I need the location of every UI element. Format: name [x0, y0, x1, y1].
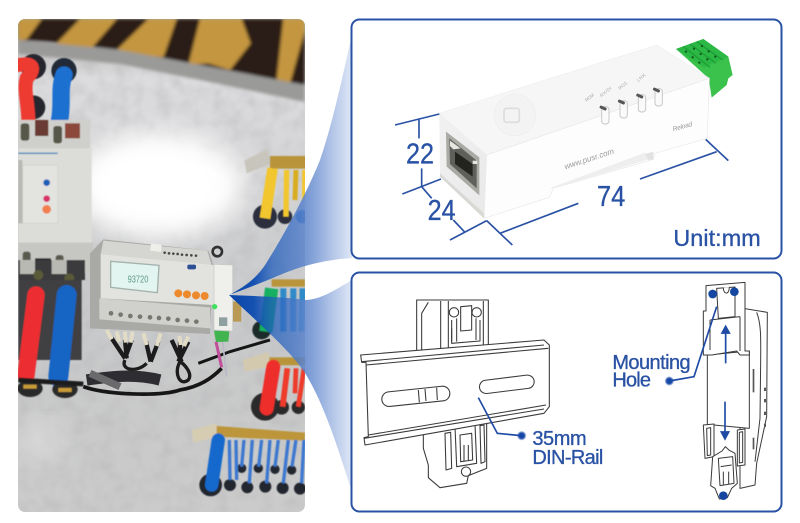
leader: mounting hole callout: [665, 307, 717, 386]
diagram: gateway rear with mounting holes: [703, 282, 767, 499]
text: indicator labels on casing: [584, 72, 647, 103]
leader: DIN-rail callout: [478, 398, 526, 440]
meter: DIN-rail energy meter with gateway: [83, 239, 270, 394]
label: Mounting Hole: Mounting: [612, 352, 691, 374]
diagram: gateway on 35mm DIN rail: [361, 300, 549, 488]
label: unit: Unit:mm: [673, 225, 761, 251]
label: width 24: 24: [428, 195, 456, 227]
label: length 74: 74: [597, 181, 625, 213]
busbars: coloured cable terminals: [192, 149, 309, 496]
arrow: down: [721, 402, 729, 439]
callout fan: upper wedge to dimensions panel: [229, 34, 352, 295]
label: 35mm DIN-Rail: DIN-Rail: [532, 447, 603, 469]
label: 35mm DIN-Rail: 35mm: [532, 428, 587, 450]
product photo: white gateway with RJ45 port: [439, 39, 733, 218]
text: website on casing: www.pusr.com: [563, 147, 615, 171]
text: indicator labels on casing: RCM: [584, 92, 595, 103]
photo: installed gateway in electrical cabinet: [17, 19, 309, 512]
text: reload label: Reload: [672, 121, 693, 133]
meter: DIN-rail energy meter with gateway: 93720: [128, 275, 149, 286]
label: height 22: 22: [406, 139, 434, 171]
arrow: up: [722, 326, 729, 363]
label: Mounting Hole: Hole: [612, 370, 651, 392]
text: indicator labels on casing: LNK: [636, 72, 647, 83]
panel: product dimensions: [352, 20, 782, 258]
mounting hole markers: [708, 287, 739, 500]
text: indicator labels on casing: RX/DI: [599, 86, 613, 98]
callout fan: lower wedge to mounting panel: [229, 280, 352, 492]
text: indicator labels on casing: RO1: [617, 80, 629, 91]
dimension lines: [395, 114, 728, 245]
panel: DIN-rail mounting: [352, 272, 782, 512]
